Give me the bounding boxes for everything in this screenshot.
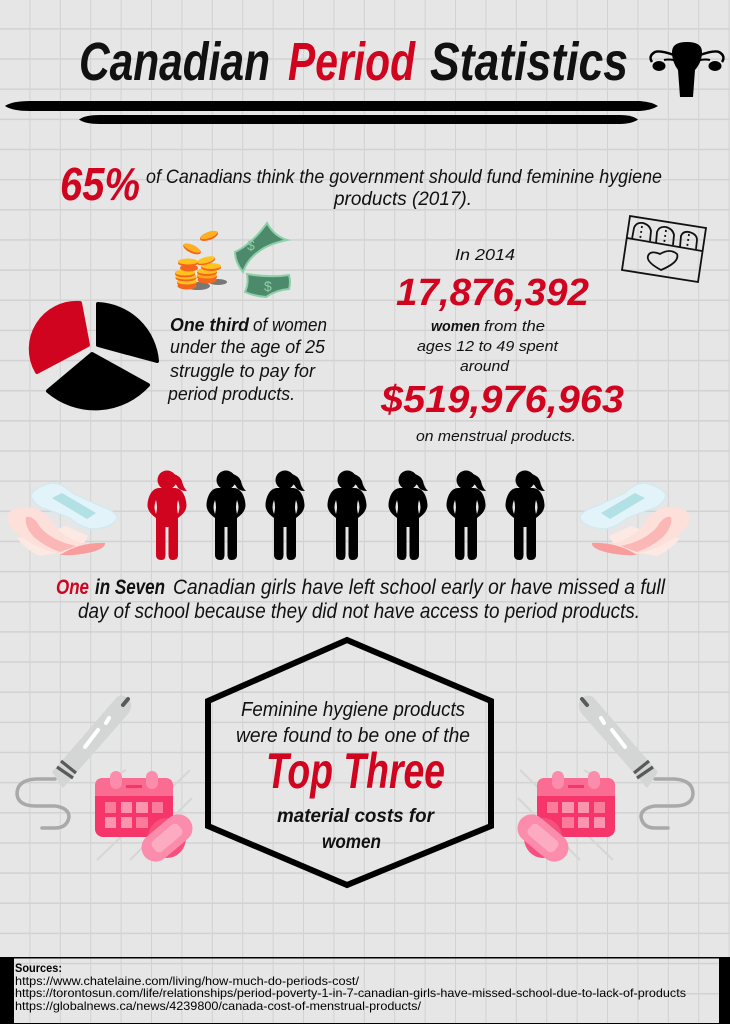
stat: 2014 spending: from the (484, 318, 545, 335)
icon: uterus (651, 42, 723, 97)
title: Period (288, 32, 416, 92)
title underline bars (5, 101, 658, 124)
text: one third of women: One third (170, 315, 250, 335)
icon: tampon and calendar left (17, 695, 198, 867)
sources panel (0, 957, 730, 1024)
sources panel: https://torontosun.com/life/relationships/period-poverty-1-in-7-canadian-girls-have-missed-school-due-to-lack-of-products (15, 986, 686, 1000)
stat: 2014 spending (380, 247, 624, 445)
stat: 2014 spending: around (460, 358, 510, 375)
text: one in seven (56, 576, 666, 623)
text: one in seven: Canadian girls have left school early or have missed a full (173, 576, 666, 599)
text: one third of women: period products. (167, 384, 295, 404)
icon: pads left (7, 483, 117, 556)
icon: box of tampons (622, 216, 706, 282)
stat: 65 percent: of Canadians think the government should fund feminine hygiene (146, 167, 662, 188)
icon: money: $ (264, 278, 272, 294)
stat: 65 percent: 65% (60, 158, 140, 210)
stat: 65 percent (60, 158, 662, 210)
text: one in seven: in Seven (95, 576, 165, 599)
text: one in seven: day of school because they did not have access to period products. (78, 600, 640, 623)
text: one third of women (167, 315, 327, 404)
pictogram: one in seven girls (148, 470, 545, 560)
pie chart: one third (31, 303, 157, 408)
icon: money: $ (247, 237, 255, 253)
sources panel: https://www.chatelaine.com/living/how-much-do-periods-cost/ (15, 974, 360, 988)
sources panel: Sources: (15, 961, 62, 975)
stat: 2014 spending: In 2014 (455, 247, 515, 264)
sources panel: https://globalnews.ca/news/4239800/canada-cost-of-menstrual-products/ (15, 999, 422, 1013)
text: one in seven: One (56, 576, 89, 599)
hexagon callout: women (322, 832, 381, 853)
text: one third of women: under the age of 25 (170, 337, 326, 357)
hexagon callout: were found to be one of the (236, 725, 470, 747)
stat: 2014 spending: women (431, 318, 480, 335)
stat: 2014 spending: on menstrual products. (416, 428, 576, 445)
text: one third of women: struggle to pay for (170, 361, 316, 381)
icon: coins (175, 229, 227, 290)
hexagon callout (208, 640, 491, 885)
stat: 2014 spending: 17,876,392 (396, 272, 589, 314)
hexagon callout: material costs for (277, 806, 436, 827)
title (79, 32, 628, 92)
stat: 2014 spending: ages 12 to 49 spent (417, 338, 559, 355)
icon: tampon and calendar right (512, 695, 693, 867)
text: one third of women: of women (253, 315, 327, 335)
hexagon callout: Feminine hygiene products (241, 699, 465, 721)
icon: pads right (580, 483, 690, 556)
stat: 2014 spending: $519,976,963 (380, 379, 624, 421)
stat: 65 percent: products (2017). (333, 189, 472, 210)
hexagon callout: Top Three (266, 743, 445, 799)
title: Canadian (79, 32, 270, 92)
icon: money (235, 223, 290, 297)
title: Statistics (430, 32, 628, 92)
